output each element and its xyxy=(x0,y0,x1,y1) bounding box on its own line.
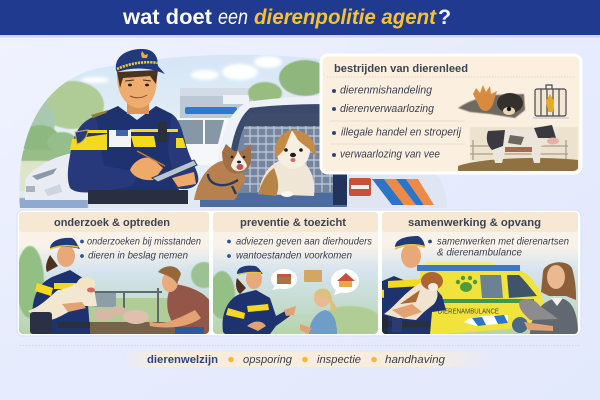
officer head xyxy=(117,70,158,114)
icon: speech bubble house xyxy=(331,269,359,295)
list: dierenverwaarlozing xyxy=(340,103,434,115)
title: ? xyxy=(438,5,451,29)
list: verwaarlozing van vee xyxy=(340,148,440,160)
title: dierenpolitie agent xyxy=(254,5,437,29)
dog one xyxy=(194,144,251,200)
title: een xyxy=(218,5,248,29)
list: onderzoeken bij misstanden xyxy=(87,236,201,248)
street background with sky, trees and building xyxy=(15,50,335,210)
dog two xyxy=(258,130,316,197)
icon: parcel xyxy=(304,270,322,282)
keyword ribbon: handhaving xyxy=(385,354,446,366)
white police car behind xyxy=(175,107,237,165)
keyword ribbon: dierenwelzijn xyxy=(147,354,218,366)
list: dierenmishandeling xyxy=(340,84,432,96)
van rear with stripes xyxy=(347,174,447,208)
list: dieren in beslag nemen xyxy=(88,250,188,262)
title: wat doet xyxy=(122,5,212,29)
woman with cat xyxy=(519,262,578,334)
list: illegale handel en stroperij xyxy=(341,126,462,138)
panel: bestrijden van dierenleed xyxy=(321,55,581,173)
policewoman xyxy=(28,238,97,334)
list: samenwerken met dierenartsen xyxy=(437,236,569,248)
main officer xyxy=(68,49,198,204)
title banner xyxy=(0,0,600,38)
list xyxy=(227,236,372,262)
keyword ribbon: inspectie xyxy=(317,354,361,366)
icon: hand shielding dog xyxy=(458,85,525,118)
list xyxy=(332,84,462,160)
farmer xyxy=(149,266,209,334)
icon: speech bubble box xyxy=(271,269,297,290)
keyword ribbon xyxy=(122,352,492,367)
icon: cage xyxy=(533,85,569,118)
title xyxy=(122,5,451,29)
list: adviezen geven aan dierhouders xyxy=(236,236,372,248)
scene: officer advising woman xyxy=(209,266,382,338)
dierenambulance xyxy=(417,262,546,334)
woman xyxy=(300,289,338,334)
panel: three task cards xyxy=(16,210,581,338)
dierenambulance: DIERENAMBULANCE xyxy=(438,306,499,316)
scene: ambulance, officer, woman with cat xyxy=(382,236,578,334)
illustration: cow on farm xyxy=(458,125,578,171)
list xyxy=(80,236,201,262)
scene: officer with dog and pigs xyxy=(16,238,217,334)
officer xyxy=(223,266,296,334)
officer with dog xyxy=(382,236,446,334)
card: onderzoek & optreden xyxy=(16,212,217,334)
hero scene xyxy=(15,49,447,210)
card: preventie & toezicht xyxy=(209,212,382,338)
card: samenwerking & opvang xyxy=(382,212,578,334)
keyword ribbon: opsporing xyxy=(243,354,293,366)
card heading: preventie & toezicht xyxy=(240,217,346,229)
list: wantoestanden voorkomen xyxy=(236,250,352,262)
white parked car left xyxy=(25,153,95,200)
officer cap xyxy=(116,49,165,74)
panel heading: bestrijden van dierenleed xyxy=(334,63,468,75)
list: & dierenambulance xyxy=(437,248,523,258)
van with dog cage xyxy=(200,95,447,208)
card heading: onderzoek & optreden xyxy=(54,217,170,229)
list xyxy=(428,236,569,258)
card heading: samenwerking & opvang xyxy=(408,217,541,229)
